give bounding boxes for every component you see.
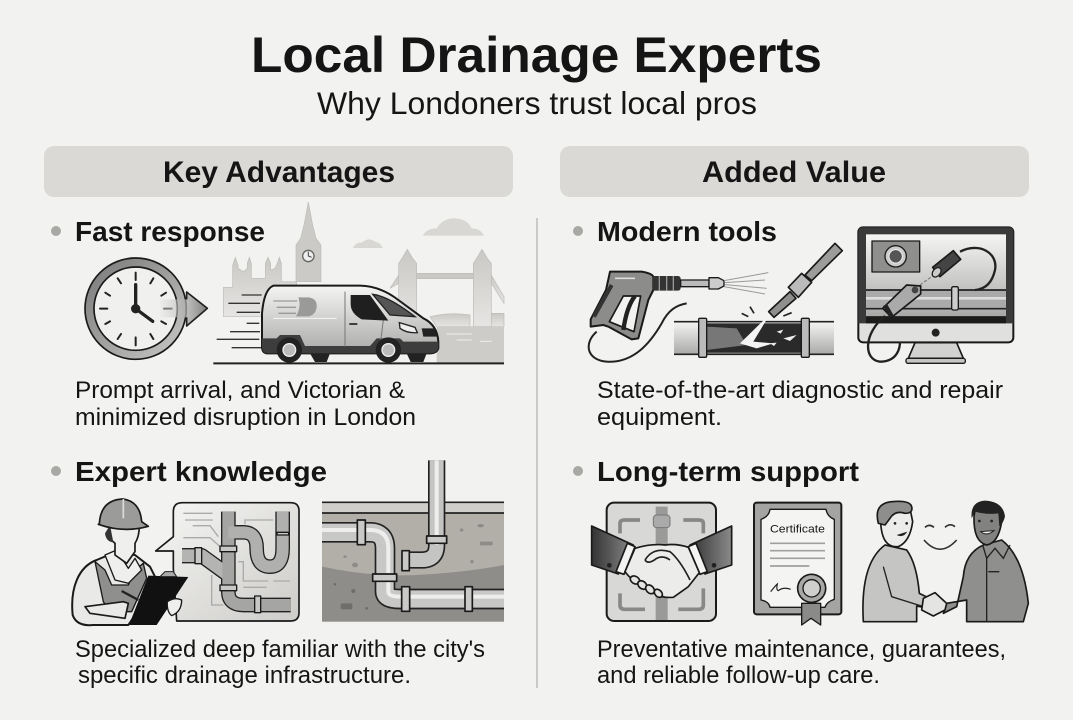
text: Expert knowledge description: Specialized deep familiar with the city's [75, 636, 485, 663]
title: Local Drainage Experts [251, 27, 822, 83]
icon: technician [922, 501, 1028, 622]
icon: certificate with rosette [754, 503, 841, 625]
illustration: clock, van and London skyline [85, 202, 504, 363]
icon: inspection monitor [858, 227, 1013, 363]
illustration: handshake, certificate and two people [592, 501, 1028, 625]
icon: smile [924, 525, 957, 549]
icon: clouds [353, 218, 484, 248]
text: Expert knowledge description [75, 636, 485, 689]
text: Fast response description: minimized disruption in London [75, 404, 416, 431]
speech bubble with pipe plan [156, 503, 299, 621]
section: Long-term support heading: Long-term support [597, 456, 859, 487]
icon: customer [863, 501, 940, 622]
speed lines [217, 295, 262, 348]
text: Modern tools description: equipment. [597, 404, 722, 431]
icon: certificate with rosette: Certificate [770, 524, 825, 536]
icon: engineer with clipboard [72, 499, 188, 625]
icon: pipe with blockage and jet [674, 243, 842, 357]
header: Key Advantages: Key Advantages [163, 156, 395, 189]
icon: delivery van [262, 286, 438, 363]
illustration: pressure washer, pipe and inspection monitor [589, 227, 1013, 363]
icon: handshake over pipes [592, 503, 732, 621]
text: Expert knowledge description: specific drainage infrastructure. [78, 662, 411, 689]
header: Added Value [560, 146, 1029, 197]
icon: London skyline [223, 202, 504, 327]
text: Modern tools description: State-of-the-art diagnostic and repair [597, 377, 1003, 404]
subtitle: Why Londoners trust local pros [317, 85, 757, 121]
text: Modern tools description [597, 377, 1003, 431]
section: Modern tools heading: Modern tools [597, 216, 777, 247]
illustration: engineer, pipe plan and underground pipes [72, 460, 504, 625]
section: Expert knowledge heading: Expert knowledge [75, 456, 327, 487]
header: Key Advantages [44, 146, 513, 197]
text: Long-term support description: and reliable follow-up care. [597, 662, 880, 689]
panel: underground pipes [322, 460, 504, 622]
header: Added Value: Added Value [702, 156, 886, 189]
text: Long-term support description [597, 636, 1006, 689]
icon: clock [85, 258, 207, 359]
water [437, 327, 504, 363]
text: Long-term support description: Preventative maintenance, guarantees, [597, 636, 1006, 663]
text: Fast response description: Prompt arrival, and Victorian & [75, 377, 405, 404]
icon: pressure washer gun [589, 272, 768, 362]
section: Fast response heading: Fast response [75, 216, 265, 247]
arrow [160, 292, 207, 326]
text: Fast response description [75, 377, 416, 431]
